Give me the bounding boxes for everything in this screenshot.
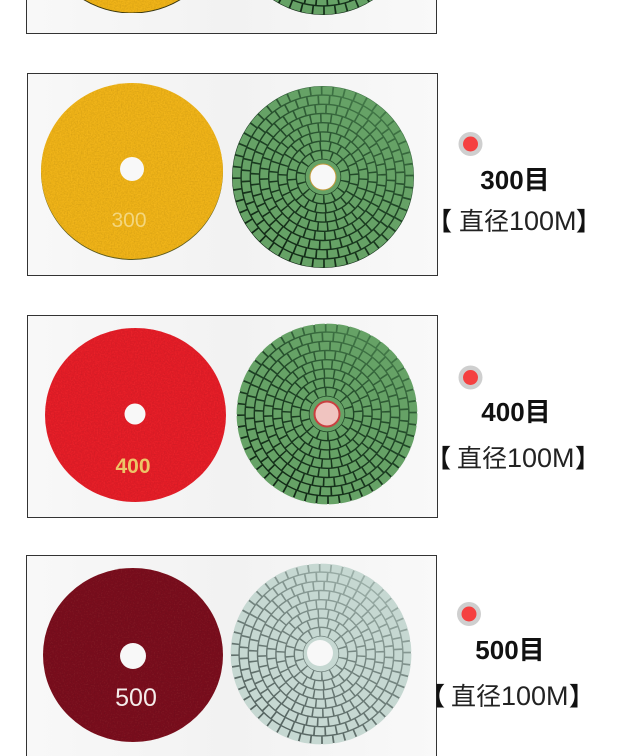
yellow pad bottom edge [41,0,223,13]
diameter text: 直径 [459,208,509,236]
bullet dot [458,366,482,390]
panel: 300 grit photo [28,74,438,276]
red pad [45,328,226,502]
grit text: 400目 [481,397,551,427]
panel: 400 grit photo [28,316,438,518]
diameter text: 【 [420,683,445,711]
diameter text: 】 [569,683,594,711]
label: 400 grit [426,366,600,473]
green tile pad [237,324,417,504]
panel: top cropped product photo [26,0,436,34]
diameter text: 】 [575,445,600,473]
label: 500 grit [420,602,594,711]
panel: 500 grit photo [26,556,436,756]
diameter text: 【 [427,208,452,236]
grey tile pad [231,564,411,744]
green pad bottom edge [232,0,414,15]
maroon pad [43,568,223,742]
diameter text: 直径 [451,683,501,711]
grit text: 300目 [480,165,550,195]
diameter text: 直径 [457,445,507,473]
yellow pad [41,83,223,260]
bullet dot [457,602,481,626]
grit text: 500目 [475,635,545,665]
diameter text: 100M [507,443,575,473]
grit number 300: 300 [111,209,147,232]
diameter text: 【 [426,445,451,473]
label: 300 grit [427,132,601,236]
green tile pad [232,86,414,268]
bullet dot [458,132,482,156]
grit number 500: 500 [115,684,157,712]
diameter text: 100M [509,206,577,236]
diameter text: 100M [501,681,569,711]
diameter text: 】 [576,208,601,236]
grit number 400: 400 [115,455,151,478]
